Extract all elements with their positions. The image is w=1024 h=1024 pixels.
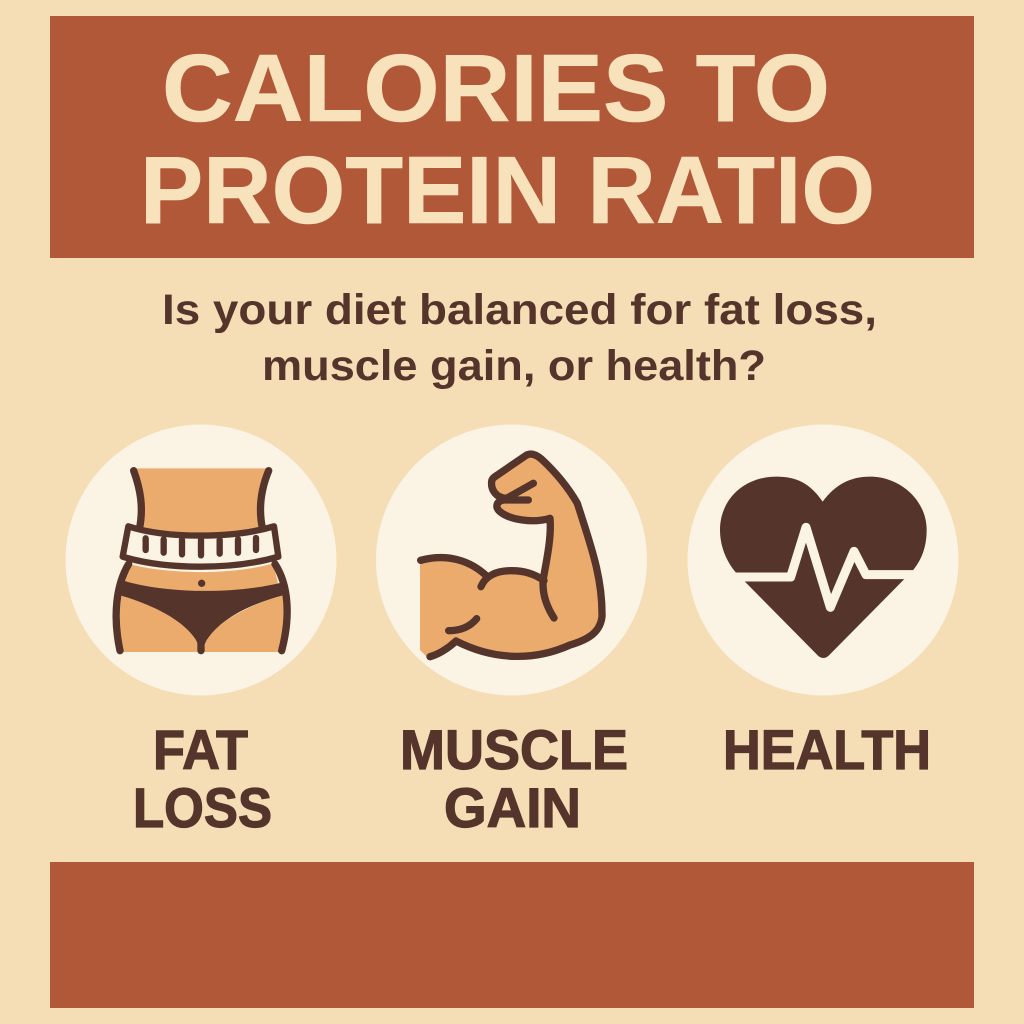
subtitle: muscle gain, or health? (262, 342, 766, 390)
title: PROTEIN RATIO (140, 137, 875, 244)
title: CALORIES TO (162, 35, 830, 142)
label: muscle gain (400, 718, 628, 839)
label: fat loss: FAT (153, 718, 248, 781)
icon: heart with pulse line (688, 424, 958, 696)
panel: health (688, 424, 958, 781)
subtitle (162, 286, 877, 390)
icon: waist with measuring tape (66, 424, 336, 696)
panel: fat loss (66, 424, 336, 839)
label: health: HEALTH (723, 718, 931, 781)
subtitle: Is your diet balanced for fat loss, (162, 286, 877, 334)
title (140, 35, 875, 244)
title banner (50, 16, 974, 258)
panel: muscle gain (376, 424, 647, 839)
label: fat loss: LOSS (133, 776, 272, 839)
label: muscle gain: GAIN (444, 776, 581, 839)
icon: flexed arm (376, 424, 647, 696)
label: muscle gain: MUSCLE (400, 718, 628, 781)
footer banner (50, 862, 974, 1008)
label: fat loss (133, 718, 272, 839)
